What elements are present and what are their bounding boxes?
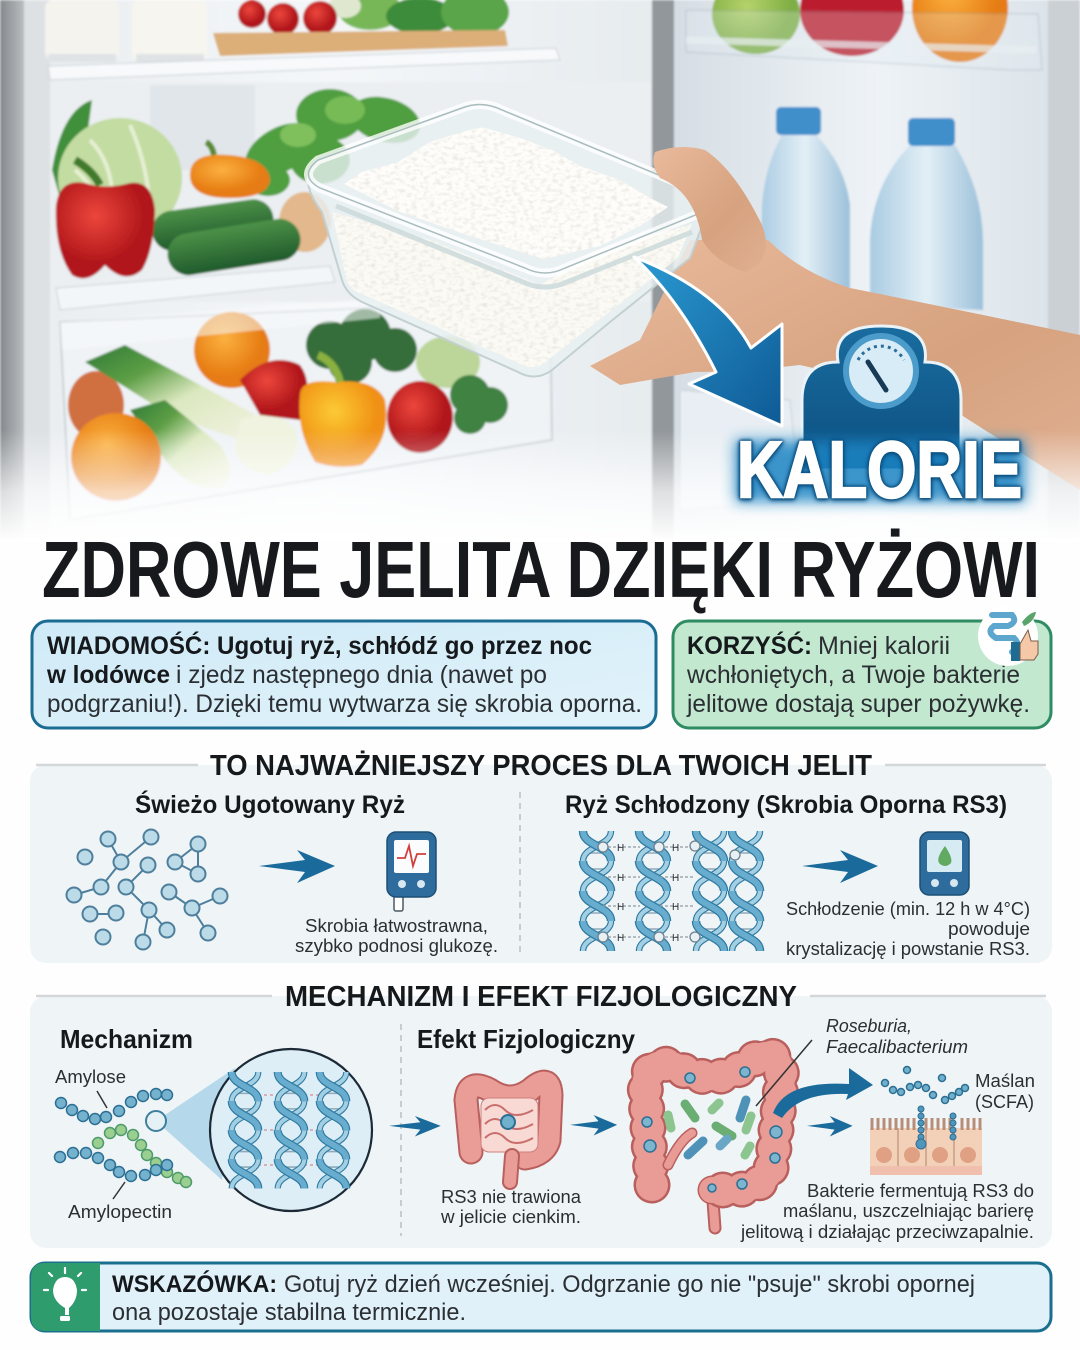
icon: crystallised RS3 helices with hydrogen bonds: H bbox=[617, 873, 624, 884]
text: fermentation caption: jelitową i działając przeciwzapalnie. bbox=[740, 1222, 1034, 1242]
label: bacteria names bbox=[826, 1016, 968, 1057]
subheading: fresh rice: Świeżo Ugotowany Ryż bbox=[135, 789, 405, 819]
subheading: cooled rice: Ryż Schłodzony (Skrobia Oporna RS3) bbox=[565, 791, 1007, 819]
icon: glucose meter with drop bbox=[920, 832, 969, 895]
wiadomość text: w lodówce bbox=[46, 661, 170, 689]
label: amylose: Amylose bbox=[55, 1067, 126, 1087]
panel: wiadomość bbox=[32, 621, 656, 728]
arrow: to small intestine bbox=[389, 1116, 441, 1136]
korzyść text: wchłoniętych, a Twoje bakterie bbox=[686, 661, 1020, 689]
text: cooled rice caption: Schłodzenie (min. 12 h w 4°C) bbox=[786, 899, 1030, 919]
icon: crystallised RS3 helices with hydrogen bonds: H bbox=[672, 843, 679, 854]
heading: process: TO NAJWAŻNIEJSZY PROCES DLA TWOICH JELIT bbox=[210, 750, 872, 782]
icon: weighing scale bbox=[802, 326, 961, 470]
drawer vegetables bbox=[60, 298, 552, 520]
icon: crystallised RS3 helices with hydrogen bonds: H bbox=[617, 933, 624, 944]
arrow: to gut barrier bbox=[807, 1116, 853, 1136]
rice in glass container bbox=[308, 104, 709, 377]
label: bacteria names: Roseburia, bbox=[826, 1016, 912, 1036]
door shelf fruit and bottles bbox=[680, 0, 1042, 510]
icon: large intestine with bacteria bbox=[642, 1055, 782, 1228]
korzyść text: Mniej kalorii bbox=[818, 632, 950, 660]
panel: mechanizm i efekt bbox=[30, 981, 1052, 1248]
panel: wskazówka bbox=[31, 1263, 1051, 1331]
tip text bbox=[112, 1270, 975, 1326]
icon: crystallised RS3 helices with hydrogen bonds: H bbox=[617, 843, 624, 854]
icon: small intestine bbox=[466, 1082, 551, 1182]
middle shelf vegetables bbox=[52, 89, 425, 310]
tip text: Gotuj ryż dzień wcześniej. Odgrzanie go nie "psuje" skrobi opornej bbox=[284, 1271, 975, 1298]
text: fermentation caption bbox=[740, 1181, 1034, 1242]
curved blue arrow bbox=[634, 257, 782, 426]
wiadomość text: podgrzaniu!). Dzięki temu wytwarza się skrobia oporna. bbox=[47, 690, 642, 718]
label: maślan: (SCFA) bbox=[975, 1092, 1034, 1112]
subheading: efekt: Efekt Fizjologiczny bbox=[417, 1024, 635, 1054]
text: small intestine caption: w jelicie cienkim. bbox=[440, 1207, 581, 1227]
icon: crystallised RS3 helices with hydrogen bonds: H bbox=[672, 873, 679, 884]
arrow: to colon bbox=[570, 1115, 617, 1135]
icon: crystallised RS3 helices with hydrogen bonds: H bbox=[617, 902, 624, 913]
magnifier cone bbox=[156, 1068, 235, 1180]
text: cooled rice caption bbox=[786, 899, 1030, 959]
icon: intestinal epithelium bbox=[870, 1106, 982, 1175]
text: small intestine caption bbox=[440, 1187, 582, 1227]
wiadomość text: i zjedz następnego dnia (nawet po bbox=[176, 661, 547, 689]
icon: light bulb bbox=[31, 1263, 100, 1331]
text: fresh rice caption: Skrobia łatwostrawna, bbox=[305, 916, 488, 936]
photo: open fridge with vegetables bbox=[0, 0, 1080, 540]
heading: mechanism: MECHANIZM I EFEKT FIZJOLOGICZNY bbox=[285, 981, 797, 1013]
magnified helices bbox=[210, 1049, 372, 1211]
arrow: fresh rice to glucose bbox=[259, 850, 335, 883]
arrow: butyrate production bbox=[773, 1068, 873, 1118]
thumb over container bbox=[653, 147, 766, 272]
icon: crystallised RS3 helices with hydrogen bonds: H bbox=[672, 933, 679, 944]
text: fermentation caption: maślanu, uszczelniając barierę bbox=[783, 1201, 1034, 1221]
fridge interior walls bbox=[0, 0, 1080, 540]
text: fresh rice caption bbox=[295, 916, 498, 956]
white fade under photo bbox=[0, 430, 1080, 542]
icon: crystallised RS3 helices with hydrogen bonds bbox=[583, 831, 760, 951]
icon: glucose meter with spike bbox=[387, 832, 436, 911]
arrow: cooled rice to stable glucose bbox=[802, 850, 878, 883]
text: cooled rice caption: powoduje bbox=[948, 919, 1030, 939]
icon: branched starch molecules bbox=[66, 830, 228, 950]
chart: amylose and amylopectin chains bbox=[54, 1088, 192, 1188]
korzyść text: jelitowe dostają super pożywkę. bbox=[686, 690, 1030, 718]
text: fermentation caption: Bakterie fermentują RS3 do bbox=[807, 1181, 1034, 1201]
tip text: ona pozostaje stabilna termicznie. bbox=[112, 1299, 466, 1326]
subheading: mechanizm: Mechanizm bbox=[60, 1024, 193, 1054]
icon: crystallised RS3 helices with hydrogen bonds: H bbox=[672, 902, 679, 913]
text: cooled rice caption: krystalizację i powstanie RS3. bbox=[786, 939, 1030, 959]
label: maślan bbox=[975, 1071, 1035, 1112]
top shelf items: milk, tomatoes, greens, board bbox=[45, 0, 560, 80]
text: small intestine caption: RS3 nie trawiona bbox=[441, 1187, 582, 1207]
korzyść text: KORZYŚĆ: bbox=[687, 630, 812, 660]
korzyść text bbox=[686, 630, 1030, 718]
icon: gut with thumb up bbox=[978, 606, 1038, 666]
label: bacteria names: Faecalibacterium bbox=[826, 1037, 968, 1057]
label: maślan: Maślan bbox=[975, 1071, 1035, 1091]
wiadomość text: WIADOMOŚĆ: Ugotuj ryż, schłódź go przez noc bbox=[47, 630, 592, 660]
panel: korzyść bbox=[673, 606, 1051, 728]
tip text: WSKAZÓWKA: bbox=[112, 1270, 277, 1298]
panel: najważniejszy proces bbox=[30, 750, 1052, 963]
focus node bbox=[146, 1111, 166, 1131]
text: fresh rice caption: szybko podnosi glukozę. bbox=[295, 936, 498, 956]
butyrate beads bbox=[882, 1066, 968, 1104]
hand holding container bbox=[590, 240, 1080, 490]
wiadomość text bbox=[46, 630, 642, 718]
label: amylopectin: Amylopectin bbox=[68, 1202, 172, 1222]
